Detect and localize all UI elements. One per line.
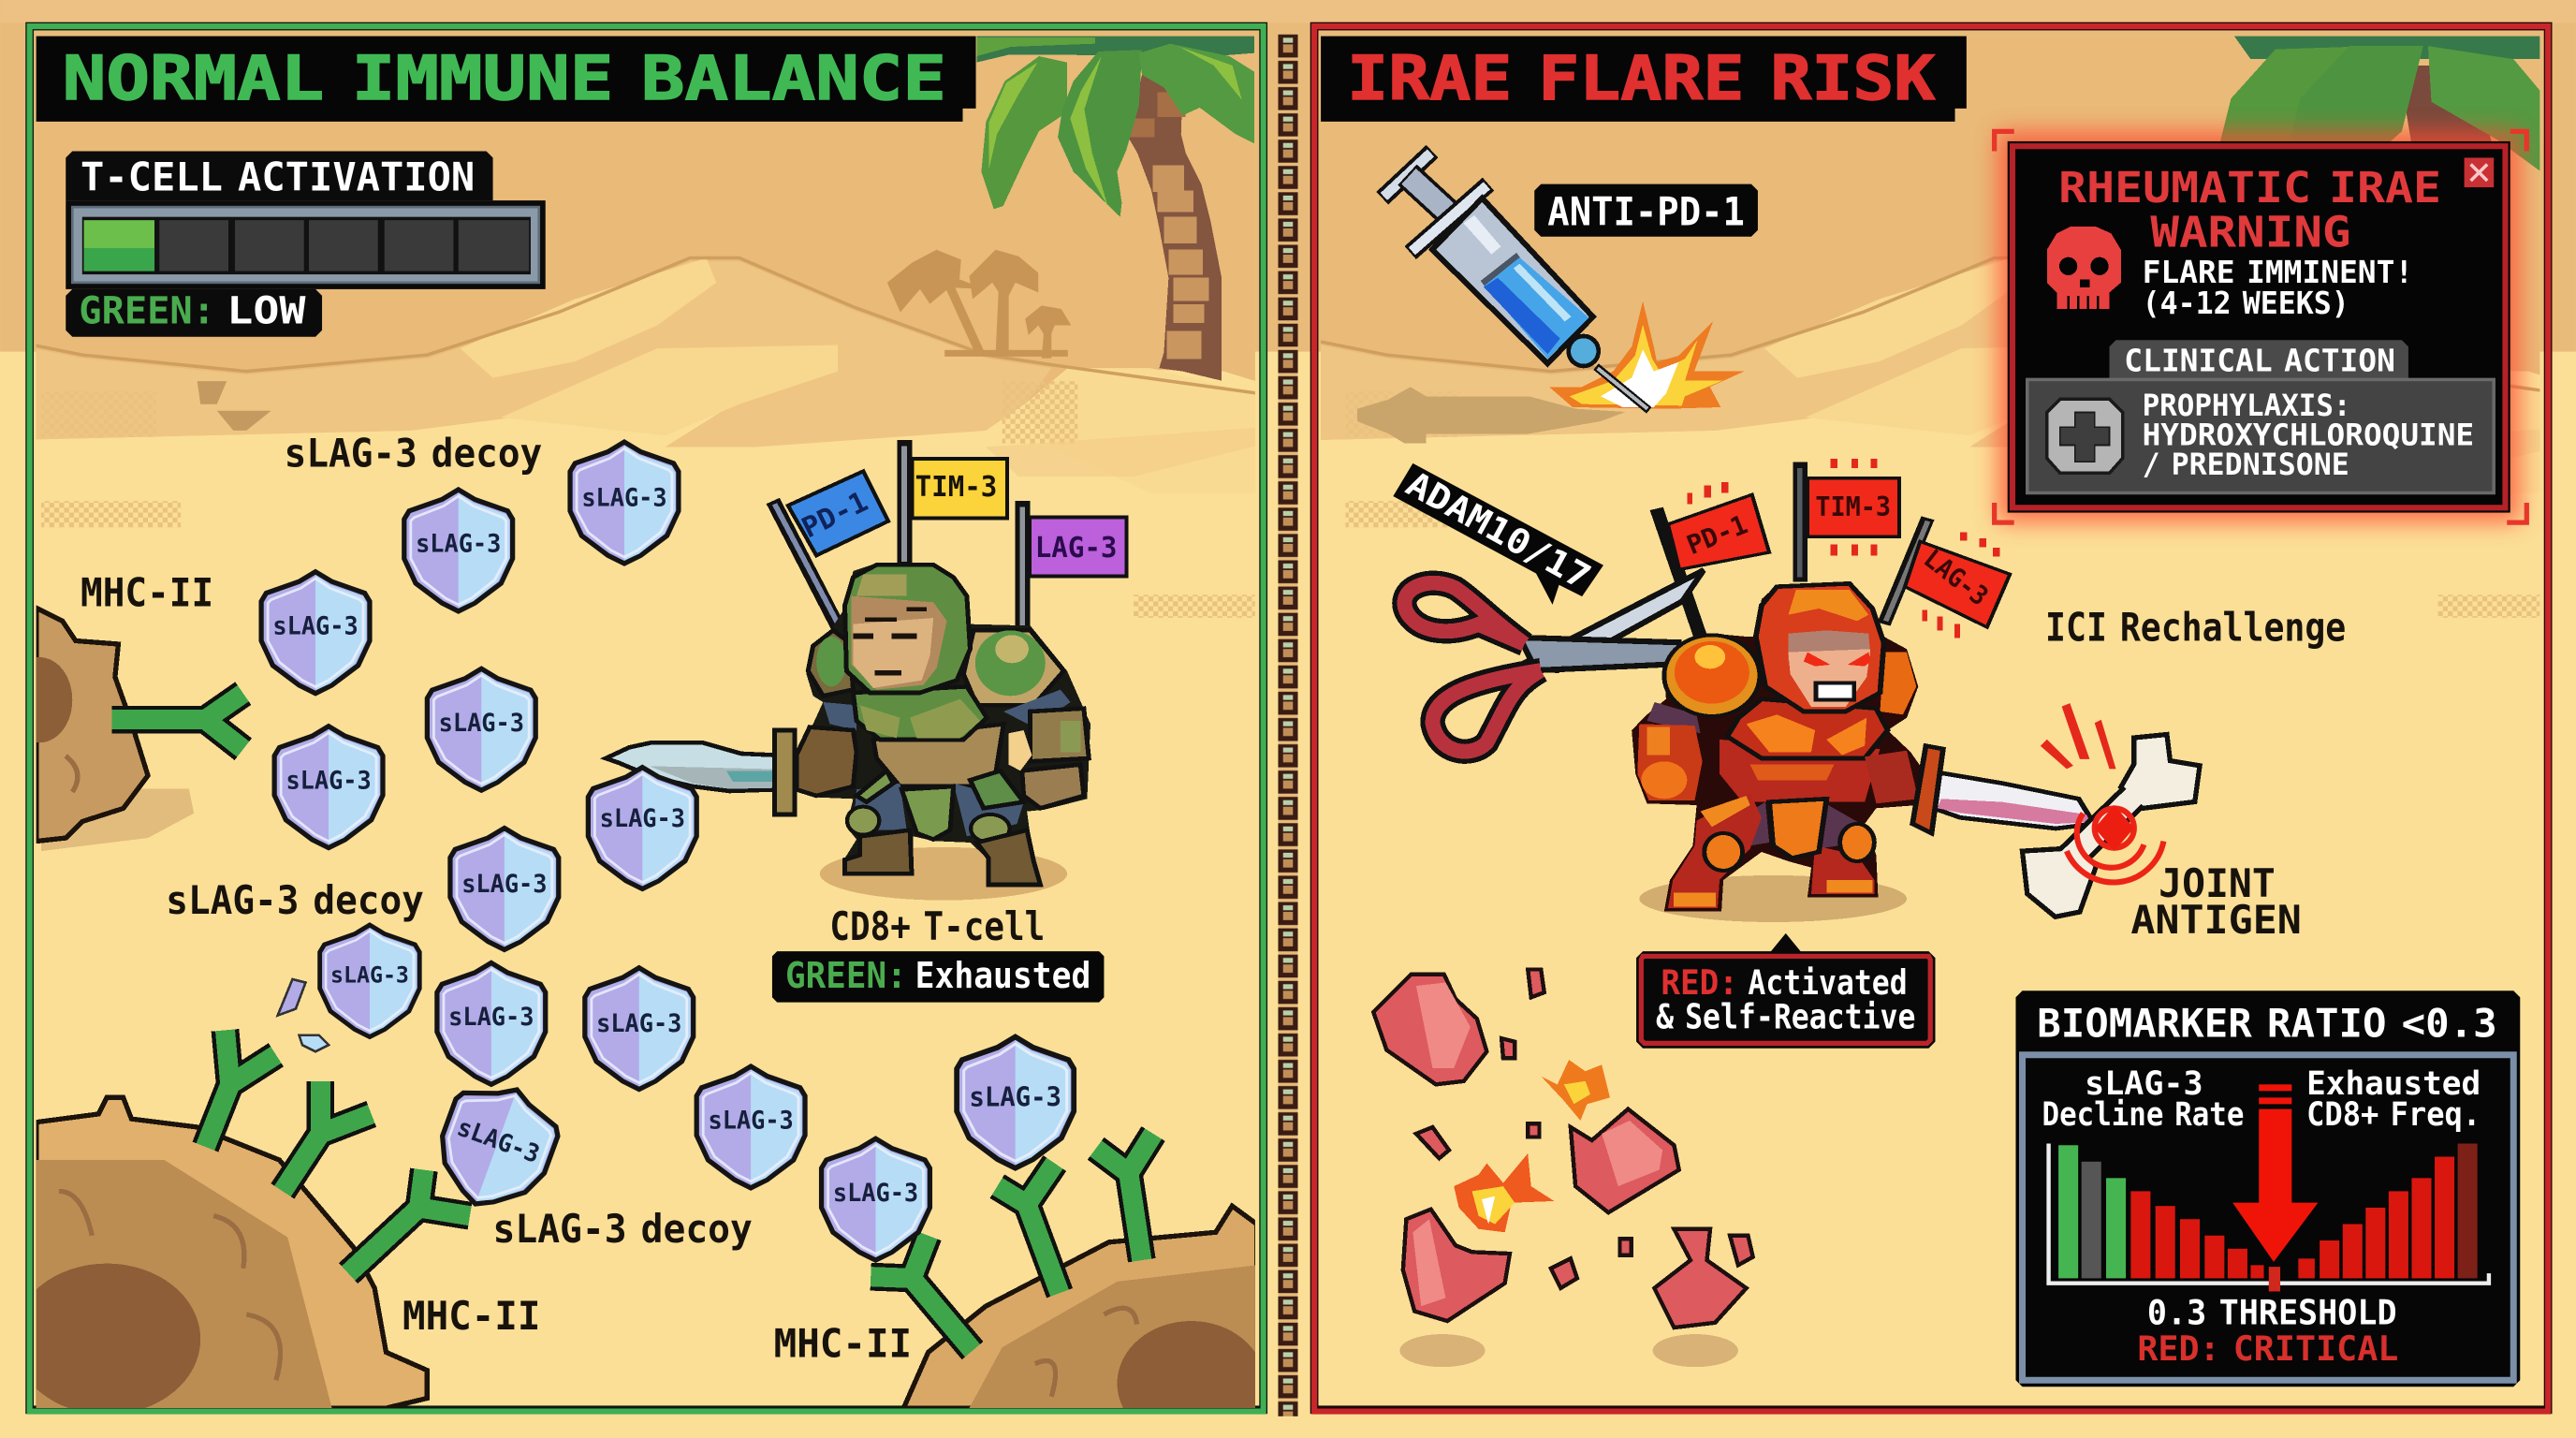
legend: red activated: & Self-Reactive [1656,997,1915,1037]
shield: sLAG-3 10: sLAG-3 [596,1010,681,1038]
flag label: TIM-3 red: TIM-3 [1815,492,1891,522]
gauge cell: filled green [84,220,154,271]
shield: sLAG-3 2 [404,490,513,611]
warning text [2143,254,2413,321]
distant palm silhouettes [887,250,1071,359]
chart axis label left: Decline Rate [2042,1095,2244,1134]
antigen presenting cell: upper left [36,605,194,851]
icon: medical cross [2047,399,2123,473]
shield: sLAG-3 large [957,1036,1074,1168]
desert backdrop left [36,36,1255,618]
shield: sLAG-3 1 [570,442,679,564]
shield: sLAG-3 8 [320,925,419,1036]
label: joint antigen: ANTIGEN [2130,897,2302,943]
shield: sLAG-3 4 [427,668,535,790]
legend: red activated: RED: [1661,962,1738,1003]
antigen presenting cell: lower left [13,1097,427,1415]
icon: palm tree [976,36,1254,381]
gauge legend: green low [66,289,322,337]
flag label: TIM-3: TIM-3 [915,471,997,504]
label: MHC-II lower left: MHC-II [402,1293,540,1339]
shield: sLAG-3 12: sLAG-3 [708,1108,794,1136]
warning text: (4-12 WEEKS) [2143,285,2349,321]
legend: green exhausted: GREEN: [785,955,907,997]
threshold text: 0.3 THRESHOLD [2147,1293,2397,1333]
icon: inflamed joint bone target [2022,703,2200,917]
bars: exhausted CD8+ frequency [2298,1143,2478,1278]
label: joint antigen [2130,860,2302,943]
title: normal immune balance: NORMAL IMMUNE BALANCE [63,44,946,114]
heading bar right [1321,37,1967,122]
warning title: WARNING [2150,207,2351,257]
chart axis label right: CD8+ Freq. [2306,1095,2481,1134]
shield: sLAG-3 2: sLAG-3 [416,531,501,559]
legend: green exhausted: Exhausted [915,955,1090,997]
shield: sLAG-3 7: sLAG-3 [461,871,547,899]
shield: sLAG-3 8: sLAG-3 [330,961,409,988]
gauge legend: green low: GREEN: [79,289,215,333]
T-cell activation gauge [66,151,546,289]
legend: red activated: Activated [1748,962,1908,1003]
chart axis label right: Exhausted [2306,1064,2481,1103]
icon: syringe with burst [1357,152,1744,443]
shield fragments [278,979,329,1051]
label: joint antigen: JOINT [2159,860,2276,906]
label: sLAG-3 decoy bottom: sLAG-3 decoy [493,1206,753,1252]
shield: sLAG-3 10 [585,968,694,1090]
shield: sLAG-3 13: sLAG-3 [833,1180,918,1208]
shield: sLAG-3 7 [450,829,559,949]
desert backdrop right [1321,36,2540,618]
shield: sLAG-3 3 [261,572,370,694]
flag label: LAG-3 red: LAG-3 [1918,543,1994,612]
shield: sLAG-3 9: sLAG-3 [448,1004,534,1032]
label: sLAG-3 decoy middle: sLAG-3 decoy [166,877,424,923]
character: activated self-reactive knight [1632,459,2094,922]
shield: sLAG-3 5: sLAG-3 [285,767,372,795]
clinical action tab: CLINICAL ACTION [2124,343,2395,379]
panel frame right [1314,26,2548,1410]
callout: rheumatic irAE warning [1995,131,2526,522]
icon: scissors ADAM10/17 [1404,570,1704,752]
shield: sLAG-3 large: sLAG-3 [969,1081,1061,1112]
icon: close button [2465,157,2494,187]
label: sLAG-3 decoy top: sLAG-3 decoy [285,430,542,476]
label: ANTI-PD-1: ANTI-PD-1 [1547,188,1745,234]
shield: sLAG-3 3: sLAG-3 [272,612,359,640]
shield: sLAG-3 6 [588,768,696,888]
gauge legend: green low: LOW [227,289,306,333]
label: CD8+ T-cell: CD8+ T-cell [829,903,1045,949]
MHC-II receptors [111,694,1153,1351]
shield: sLAG-3 9 [437,962,546,1084]
icon: flames [1454,1060,1610,1232]
shield: sLAG-3 4: sLAG-3 [439,710,524,738]
flag label: LAG-3: LAG-3 [1035,532,1117,565]
arrow: threshold marker [2232,1084,2318,1291]
icon: palm tree right [2217,37,2539,178]
flag label: PD-1: PD-1 [797,485,873,545]
chart axes [2049,1143,2489,1284]
chart axis label left [2042,1064,2244,1134]
label: MHC-II lower right: MHC-II [774,1321,912,1367]
panel: normal immune balance [0,0,1298,1438]
warning text: FLARE IMMINENT! [2143,254,2413,290]
rocks [198,381,271,431]
panel: irAE flare risk [1305,0,2576,1438]
shield: sLAG-3 12 [696,1066,805,1188]
clinical action box: PROPHYLAXIS: [2143,389,2351,423]
label: ICI Rechallenge: ICI Rechallenge [2045,604,2346,650]
chart axis label right [2306,1064,2481,1134]
warning title [2058,163,2441,257]
label: MHC-II upper: MHC-II [80,570,213,616]
label: ADAM10/17: ADAM10/17 [1399,463,1597,597]
title: irAE flare risk: IRAE FLARE RISK [1347,44,1935,114]
legend: green exhausted [772,951,1104,1003]
chart panel: biomarker ratio [2015,990,2520,1387]
shield: sLAG-3 tilted: sLAG-3 [453,1113,543,1169]
antigen presenting cell: lower right [900,1202,1255,1408]
shield: sLAG-3 1: sLAG-3 [581,485,667,513]
character: exhausted CD8+ T-cell knight [606,440,1127,901]
panel frame left [30,26,1264,1410]
chart axis label left: sLAG-3 [2085,1064,2203,1103]
knight shoulder pauldron [1664,635,1760,716]
shield: sLAG-3 5 [274,726,383,848]
chart title: BIOMARKER RATIO <0.3 [2037,1000,2497,1046]
T-cell activation gauge: T-CELL ACTIVATION [80,154,475,200]
threshold text [2137,1293,2398,1369]
legend: red activated [1636,933,1935,1049]
clinical action box: / PREDNISONE [2143,448,2349,482]
clinical action box: HYDROXYCHLOROQUINE [2143,419,2474,453]
bars: decline rate [2058,1145,2263,1278]
shield: sLAG-3 tilted [424,1071,568,1223]
shield: sLAG-3 13 [822,1138,929,1260]
heading bar left [37,37,976,122]
icon: skull [2047,227,2121,309]
divider: center film strip [1278,33,1298,1416]
icon: shattered tissue fragments [1373,969,1753,1367]
warning title: RHEUMATIC IRAE [2058,163,2441,213]
clinical action box [2027,379,2494,493]
flag label: PD-1 red: PD-1 [1682,509,1752,561]
threshold text: RED: CRITICAL [2137,1328,2398,1369]
shield: sLAG-3 6: sLAG-3 [600,805,685,833]
